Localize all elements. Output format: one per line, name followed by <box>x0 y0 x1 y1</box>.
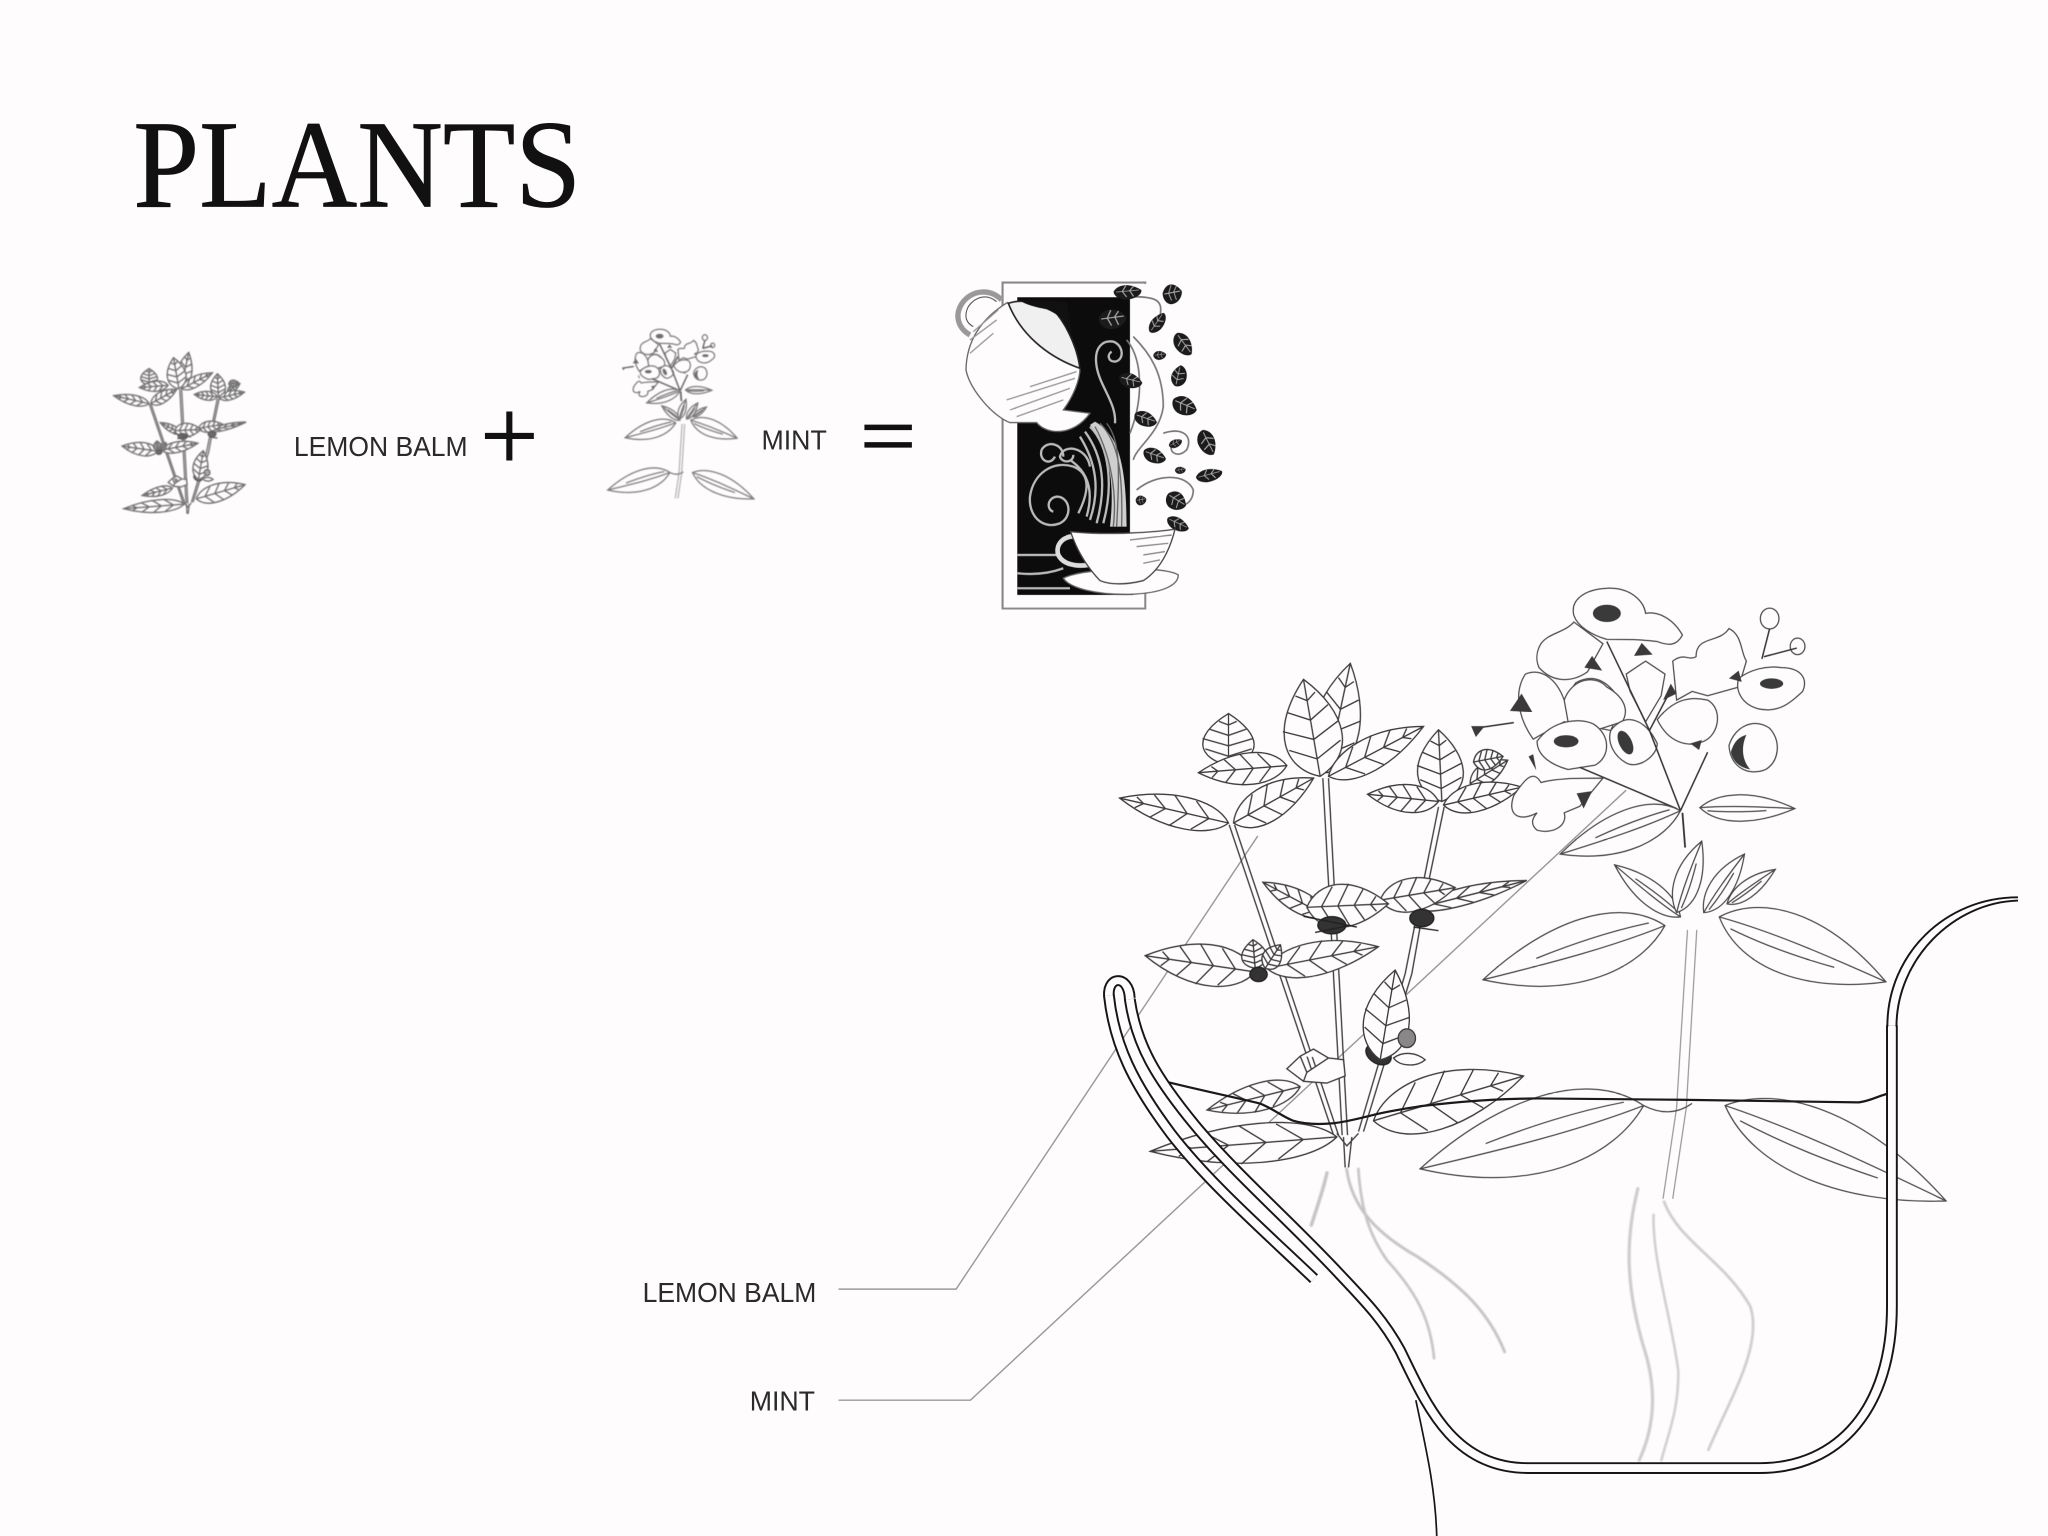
mint leaves: upper pair <box>1555 792 1795 873</box>
equals sign: = <box>860 389 916 484</box>
roots: lemon balm <box>1311 1169 1505 1358</box>
small leaves beside the flowers <box>1465 746 1512 792</box>
saucer <box>1063 569 1178 594</box>
title: PLANTS <box>133 95 581 234</box>
spout lip caps <box>1104 976 1135 1000</box>
mint leaves: large pair <box>1476 888 1895 1011</box>
mint flower head <box>1512 588 1805 831</box>
white swirls on black <box>1017 341 1122 588</box>
leader line: mint <box>839 790 1626 1400</box>
lower leaves <box>1149 1049 1530 1171</box>
leaves: top right cluster <box>1366 729 1524 819</box>
vine stems <box>1127 297 1193 506</box>
label: lemon balm in equation: LEMON BALM <box>294 431 468 462</box>
teapot cross-section outline <box>1104 897 2018 1536</box>
mint leaves: bud whorl <box>1608 836 1780 927</box>
leaves: top left cluster <box>1117 714 1321 839</box>
tube wall and pot body, inner pair: dark then gap <box>1130 999 1892 1468</box>
tube wall, outer pair: dark then gap <box>1109 995 1314 1279</box>
mint main stem <box>1663 813 1697 1199</box>
label: mint in equation: MINT <box>761 424 827 455</box>
flower stalks <box>1475 629 1797 811</box>
leaves: top centre cluster <box>1275 658 1430 791</box>
shoulder curves at right <box>1887 897 2018 1027</box>
leader line: lemon balm <box>839 836 1258 1289</box>
pour stream <box>1090 422 1127 527</box>
flower dark details <box>1471 605 1783 808</box>
teapot opening <box>1008 301 1080 368</box>
teapot shading <box>970 310 1077 417</box>
cup <box>1071 529 1175 584</box>
teapot handle <box>958 292 1002 335</box>
dark leaf nodes <box>1250 909 1438 1069</box>
icon: small mint plant <box>605 329 757 508</box>
illustration: lemon balm plant <box>1117 658 1530 1171</box>
roots: mint <box>1629 1189 1753 1460</box>
plus sign: + <box>480 379 538 493</box>
label: mint callout: MINT <box>750 1386 815 1417</box>
illustration: mint plant <box>1412 588 1957 1234</box>
water line <box>1165 1081 1887 1124</box>
lower bud leaf and flower <box>1357 966 1425 1065</box>
mint leaves: lower pair <box>1412 1069 1957 1234</box>
teapot body <box>966 303 1090 431</box>
icon: small lemon balm plant <box>113 351 247 515</box>
stems <box>1229 778 1444 1167</box>
cup handle <box>1058 536 1088 565</box>
dark herb leaves <box>1099 284 1224 536</box>
pot foot line <box>1416 1400 1437 1536</box>
label: lemon balm callout: LEMON BALM <box>643 1277 816 1308</box>
icon: teapot pouring into cup with herbs <box>958 283 1224 609</box>
leaves: middle tier <box>1143 871 1529 992</box>
